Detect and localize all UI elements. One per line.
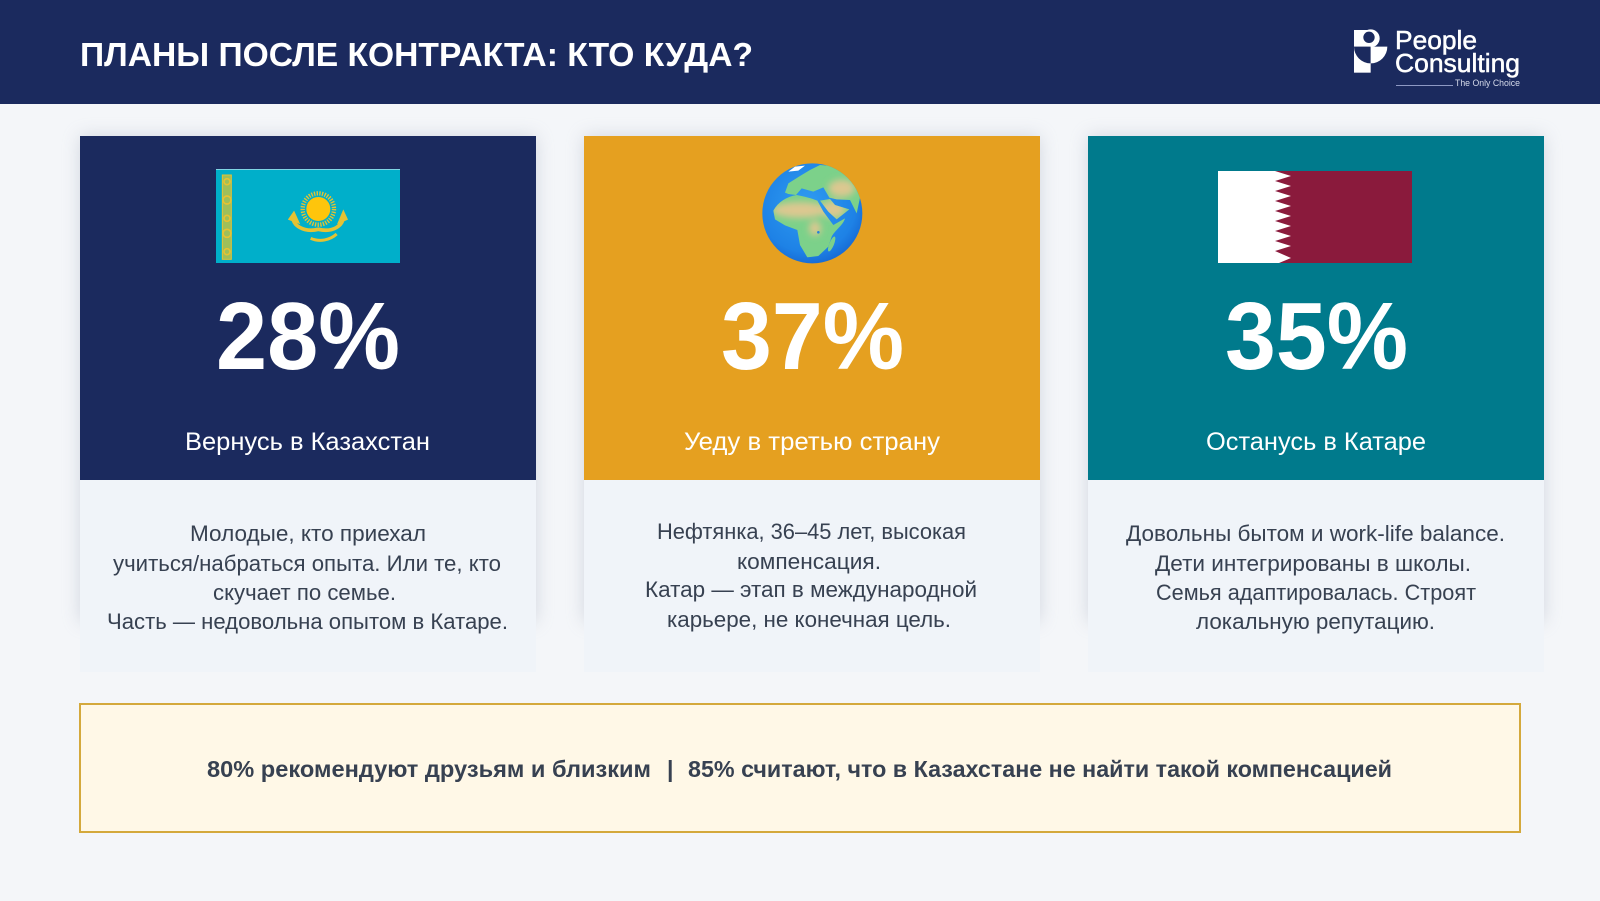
percentage 28%: 28%	[216, 283, 400, 390]
card body	[80, 480, 536, 672]
logo: The Only Choice	[1455, 78, 1520, 88]
description: Часть — недовольна опытом в Катаре.	[107, 609, 508, 634]
panel: stay in Qatar	[1088, 136, 1544, 672]
logo: People	[1395, 25, 1477, 55]
logo	[1354, 25, 1520, 88]
panel: third country	[584, 136, 1040, 672]
icon: Qatar flag	[1218, 171, 1412, 263]
description: компенсация.	[737, 549, 881, 574]
label: Уеду в третью страну	[684, 428, 941, 456]
description	[1126, 521, 1505, 634]
description: Нефтянка, 36–45 лет, высокая	[657, 519, 966, 544]
card body	[584, 480, 1040, 672]
callout text: |	[667, 756, 673, 782]
card header navy	[80, 136, 536, 480]
description: Семья адаптировалась. Строят	[1156, 580, 1476, 605]
description	[645, 519, 977, 632]
header bar	[0, 0, 1600, 104]
card body	[1088, 480, 1544, 672]
callout	[80, 704, 1520, 832]
card header amber	[584, 136, 1040, 480]
card header teal	[1088, 136, 1544, 480]
description: Довольны бытом и work-life balance.	[1126, 521, 1505, 546]
callout text: 80% рекомендуют друзьям и близким	[207, 756, 651, 782]
description: Катар — этап в международной	[645, 577, 977, 602]
label: Вернусь в Казахстан	[185, 428, 430, 456]
description: учиться/набраться опыта. Или те, кто	[113, 551, 501, 576]
percentage 37%: 37%	[721, 283, 904, 390]
percentage 35%: 35%	[1225, 283, 1408, 390]
callout text: 85% считают, что в Казахстане не найти такой компенсацией	[688, 756, 1392, 782]
description: Дети интегрированы в школы.	[1155, 551, 1471, 576]
description: локальную репутацию.	[1196, 609, 1435, 634]
callout text	[207, 756, 1392, 782]
icon: Kazakhstan flag	[216, 169, 400, 263]
logo: Consulting	[1395, 48, 1520, 78]
description: скучает по семье.	[213, 580, 396, 605]
description: карьере, не конечная цель.	[667, 607, 951, 632]
description: Молодые, кто приехал	[190, 521, 426, 546]
title: ПЛАНЫ ПОСЛЕ КОНТРАКТА: КТО КУДА?	[80, 36, 753, 73]
icon: globe	[760, 160, 867, 263]
label: Останусь в Катаре	[1206, 428, 1426, 456]
panel: return to Kazakhstan	[80, 136, 536, 672]
description	[107, 521, 508, 634]
